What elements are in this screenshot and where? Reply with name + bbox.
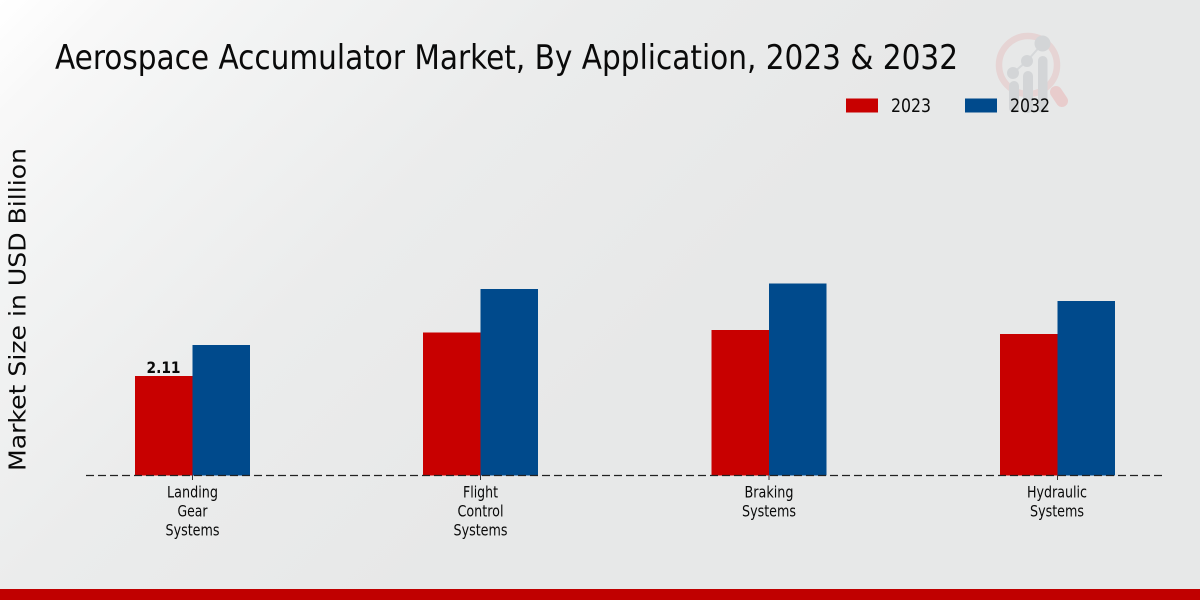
legend: 2032 swatch <box>965 98 997 112</box>
axis ticks <box>192 476 1058 480</box>
legend: 2032 label: 2032 <box>1010 95 1050 117</box>
value label: 2.11 <box>146 358 180 377</box>
category label: Landing Gear Systems <box>166 482 220 540</box>
bars: Landing Gear Systems <box>135 345 250 476</box>
bars: Flight Control Systems <box>423 289 538 476</box>
category label: Flight Control Systems: Flight <box>463 482 498 502</box>
x axis baseline <box>86 474 1164 476</box>
category label: Hydraulic Systems: Hydraulic <box>1027 482 1087 502</box>
category label: Flight Control Systems: Control <box>458 502 504 520</box>
category label: Flight Control Systems <box>454 482 508 540</box>
category label: Hydraulic Systems: Systems <box>1030 502 1084 520</box>
bar chart <box>86 284 1164 540</box>
category label: Flight Control Systems: Systems <box>454 520 508 540</box>
title: Aerospace Accumulator Market, By Application, 2023 & 2032 <box>55 38 958 78</box>
category label: Landing Gear Systems: Systems <box>166 520 220 540</box>
icon: watermark logo <box>999 36 1062 113</box>
legend <box>846 95 1050 117</box>
legend: 2023 label: 2023 <box>891 95 931 117</box>
category label: Hydraulic Systems <box>1027 482 1087 520</box>
footer bar <box>0 589 1200 600</box>
category label: Braking Systems: Systems <box>742 502 796 520</box>
category label: Landing Gear Systems: Landing <box>167 482 218 502</box>
legend: 2023 swatch <box>846 98 878 112</box>
y axis label: Market Size in USD Billion <box>4 148 32 471</box>
category label: Braking Systems: Braking <box>744 482 794 502</box>
bars: Braking Systems <box>712 284 826 476</box>
category label: Braking Systems <box>742 482 796 520</box>
category label: Landing Gear Systems: Gear <box>178 502 208 520</box>
bars: Hydraulic Systems <box>1000 301 1115 476</box>
